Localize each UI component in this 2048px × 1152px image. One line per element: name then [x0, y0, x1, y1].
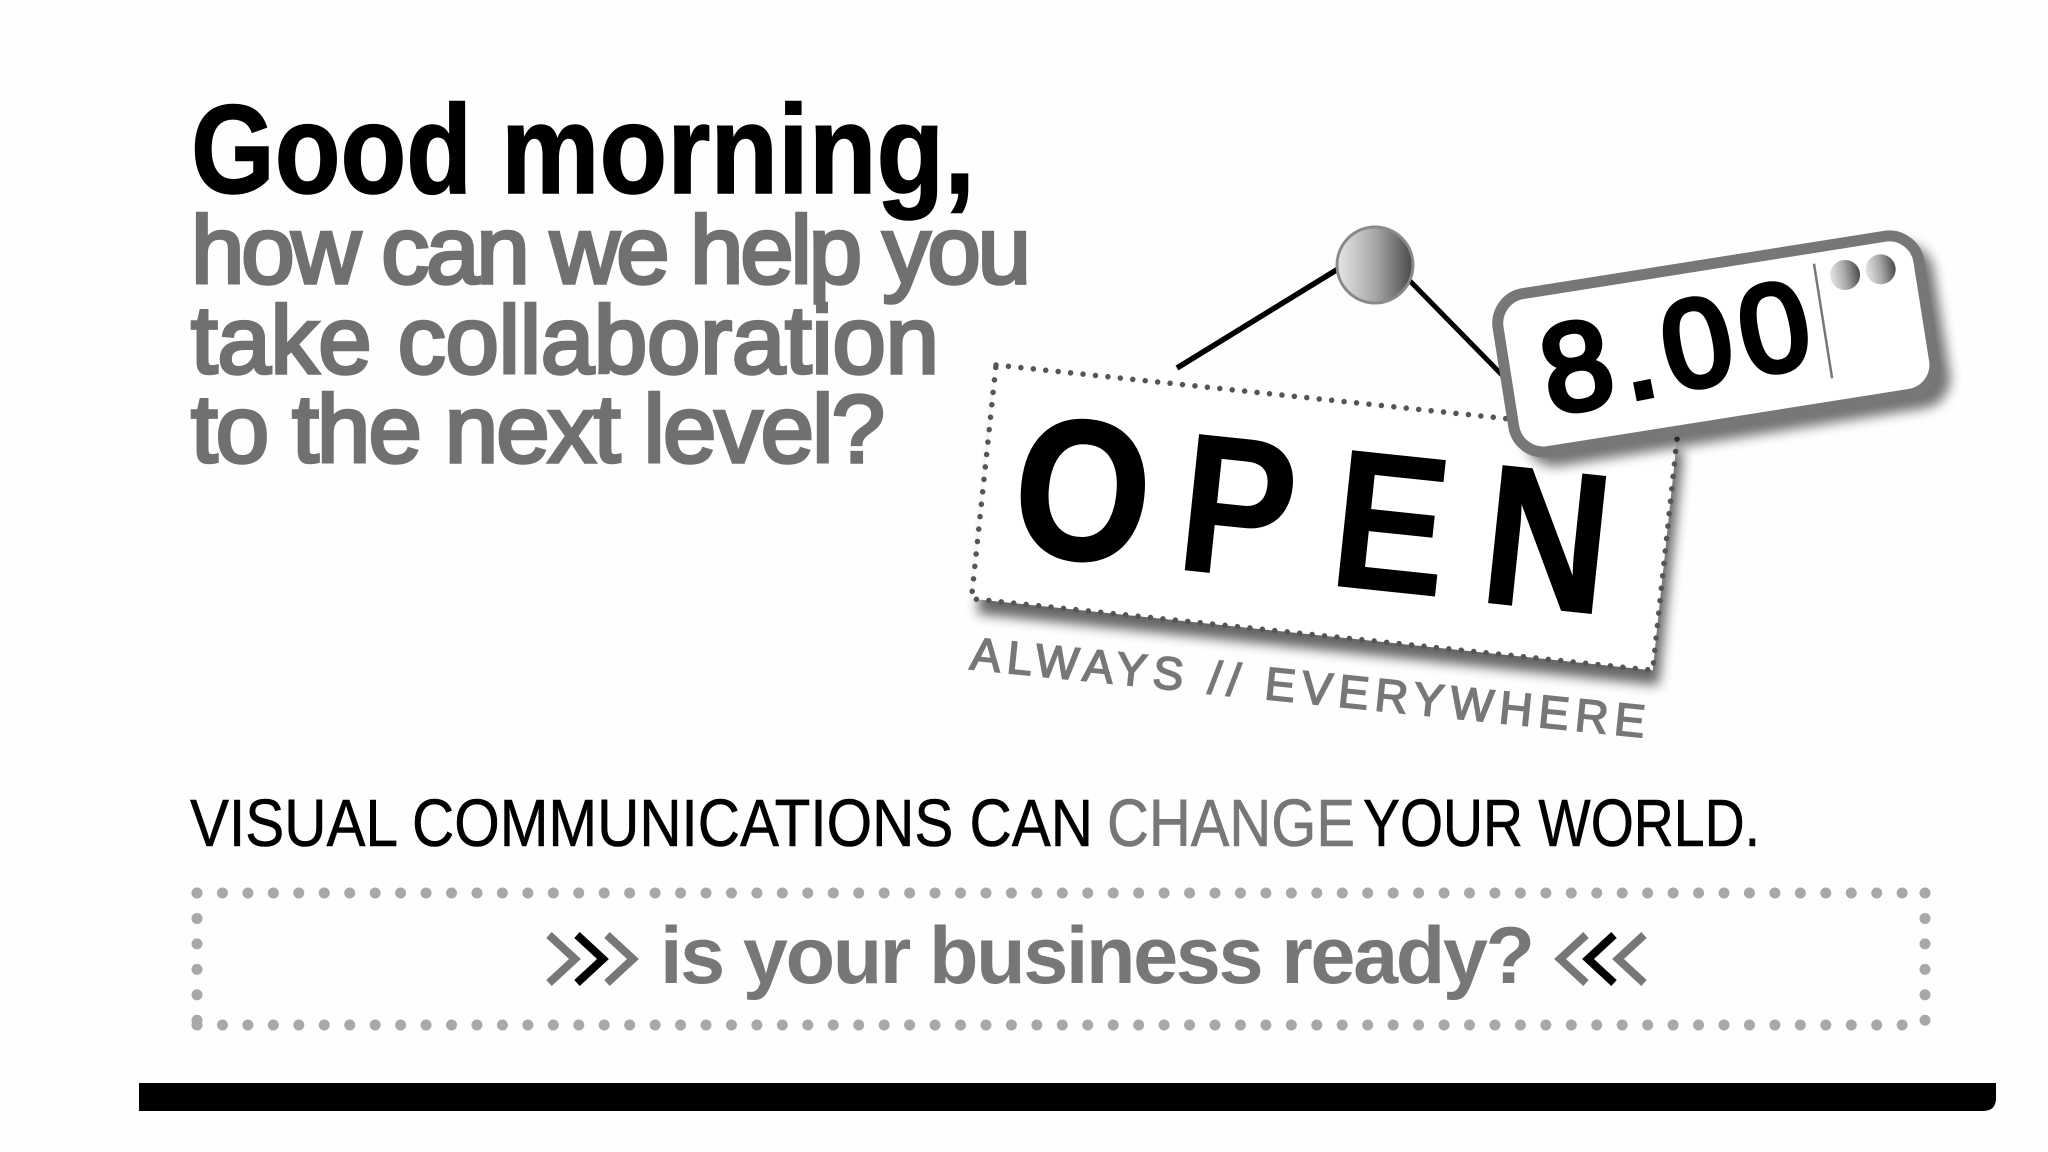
- tag dot two: [1864, 252, 1898, 287]
- sign word OPEN: O: [1004, 373, 1162, 608]
- dotted call-to-action box: [197, 893, 1925, 1025]
- statement line: CHANGE: [1107, 786, 1355, 861]
- hanging open sign: [968, 227, 1683, 747]
- headline: question: take collaboration: [191, 287, 939, 394]
- time tag: [1493, 230, 1955, 472]
- tagline: ALWAYS // EVERYWHERE: [968, 627, 1648, 747]
- bottom black bar: [139, 1083, 1996, 1111]
- statement line: VISUAL COMMUNICATIONS CAN: [190, 786, 1093, 861]
- headline: greeting: [191, 79, 975, 220]
- sign shadow: [977, 380, 1683, 685]
- question text: is your business ready?: [660, 911, 1535, 1001]
- sign word OPEN: E: [1322, 406, 1461, 640]
- headline: greeting: Good: [191, 79, 472, 220]
- headline: greeting: morning,: [501, 79, 975, 220]
- tag divider: [1814, 264, 1832, 378]
- headline: question: how can we help you: [191, 197, 1031, 304]
- sign word OPEN: [1004, 373, 1621, 656]
- headline: question: to the next level?: [191, 376, 885, 483]
- statement line: YOUR WORLD.: [1363, 786, 1760, 861]
- sign board: [971, 365, 1677, 670]
- statement line: [190, 786, 1760, 861]
- pin: [1337, 227, 1413, 303]
- tag time: 8.00: [1530, 254, 1821, 441]
- tag body: [1493, 232, 1939, 456]
- right chevrons: [1560, 935, 1644, 983]
- sign word OPEN: N: [1473, 422, 1621, 656]
- right hanging string: [1408, 279, 1505, 378]
- dotted border: [197, 893, 1925, 1025]
- left chevrons: [549, 935, 633, 983]
- tag shadow: [1504, 239, 1955, 471]
- left hanging string: [1177, 269, 1338, 368]
- tag dot one: [1828, 258, 1862, 292]
- sign word OPEN: P: [1169, 390, 1308, 623]
- headline: [191, 79, 1031, 483]
- headline: question: [191, 197, 1031, 483]
